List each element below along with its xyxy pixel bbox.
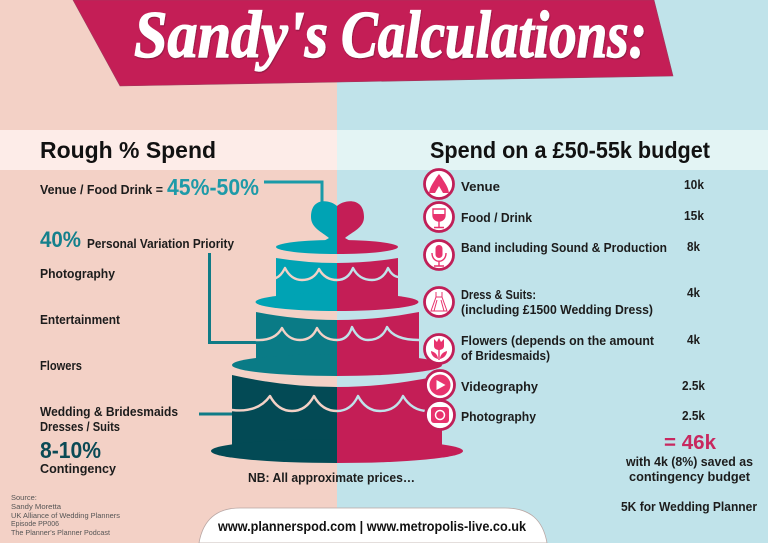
amount: band: 8k	[687, 240, 700, 254]
icon: microphone	[424, 240, 454, 270]
source credits: The Planner's Planner Podcast	[11, 528, 111, 537]
title banner	[73, 0, 673, 86]
amount: venue: 10k	[684, 178, 704, 192]
source credits: Episode PP006	[11, 519, 59, 528]
row: videography: Videography	[461, 380, 538, 394]
label: wedding and bridesmaids dresses	[40, 405, 178, 434]
amount: dress and suits: 4k	[687, 286, 700, 300]
panel: left background	[0, 0, 337, 543]
row: flowers: Flowers (depends on the amount	[461, 334, 655, 348]
source credits: Source:	[11, 493, 37, 502]
icon: wine glass	[424, 202, 454, 232]
heading band: left	[0, 130, 337, 170]
footer tab	[199, 508, 547, 543]
row: band: Band including Sound & Production	[461, 241, 667, 255]
row: dress and suits	[461, 288, 653, 317]
icon: camera	[426, 400, 454, 430]
total: 46k: = 46k	[664, 432, 717, 454]
label: venue / food drink: Venue / Food Drink =	[40, 183, 163, 197]
source credits: Sandy Moretta	[11, 502, 62, 511]
connector: personal variation to middle tier	[210, 253, 257, 342]
heading: spend on budget: Spend on a £50-55k budget	[430, 137, 710, 163]
footer links: www.plannerspod.com | www.metropolis-live.co.uk	[217, 519, 526, 534]
stat: 40%: 40%	[40, 227, 81, 252]
connector: venue to cake top	[264, 182, 322, 203]
source credits	[11, 493, 120, 537]
icon: video play	[426, 370, 454, 400]
budget list	[424, 170, 705, 430]
row: flowers: of Bridesmaids)	[461, 349, 550, 363]
label: wedding and bridesmaids dresses: Dresses / Suits	[40, 420, 120, 434]
label: photography: Photography	[40, 267, 115, 281]
title	[134, 0, 647, 72]
row: dress and suits: (including £1500 Wedding Dress)	[461, 303, 653, 317]
source credits: UK Alliance of Wedding Planners	[11, 511, 120, 520]
row: dress and suits: Dress & Suits:	[461, 288, 536, 302]
title: Calculations:	[341, 0, 647, 72]
label: contingency: Contingency	[40, 462, 116, 476]
stat: 8-10%: 8-10%	[40, 437, 101, 463]
row: photography: Photography	[461, 410, 536, 424]
icon: dress	[424, 288, 454, 316]
icon: tulip	[424, 334, 454, 364]
note: contingency budget	[625, 455, 753, 484]
cake: left half	[211, 201, 337, 463]
connector: dresses to bottom tier	[199, 412, 233, 416]
note: contingency budget: contingency budget	[629, 470, 751, 484]
stat: 45%-50%: 45%-50%	[167, 174, 259, 200]
label: personal variation priority: Personal Variation Priority	[87, 237, 234, 251]
icon: venue tent	[424, 170, 454, 198]
note: approximate prices: NB: All approximate prices…	[248, 471, 415, 485]
row: flowers	[461, 334, 655, 363]
note: wedding planner: 5K for Wedding Planner	[621, 500, 757, 514]
heading band: right	[337, 130, 768, 170]
label: entertainment: Entertainment	[40, 313, 121, 327]
cake: right half	[337, 201, 463, 463]
heading: rough % spend: Rough % Spend	[40, 137, 216, 163]
amount: videography: 2.5k	[682, 379, 705, 393]
label: flowers: Flowers	[40, 359, 82, 373]
row: venue: Venue	[461, 180, 500, 194]
cake illustration	[211, 201, 463, 463]
label: wedding and bridesmaids dresses: Wedding & Bridesmaids	[40, 405, 178, 419]
note: contingency budget: with 4k (8%) saved as	[625, 455, 753, 469]
panel: right background	[337, 0, 768, 543]
title: Sandy's	[134, 0, 328, 72]
amount: photography: 2.5k	[682, 409, 705, 423]
left column: spend percentages	[40, 174, 259, 476]
amount: flowers: 4k	[687, 333, 700, 347]
row: food / drink: Food / Drink	[461, 211, 532, 225]
amount: food / drink: 15k	[684, 209, 704, 223]
